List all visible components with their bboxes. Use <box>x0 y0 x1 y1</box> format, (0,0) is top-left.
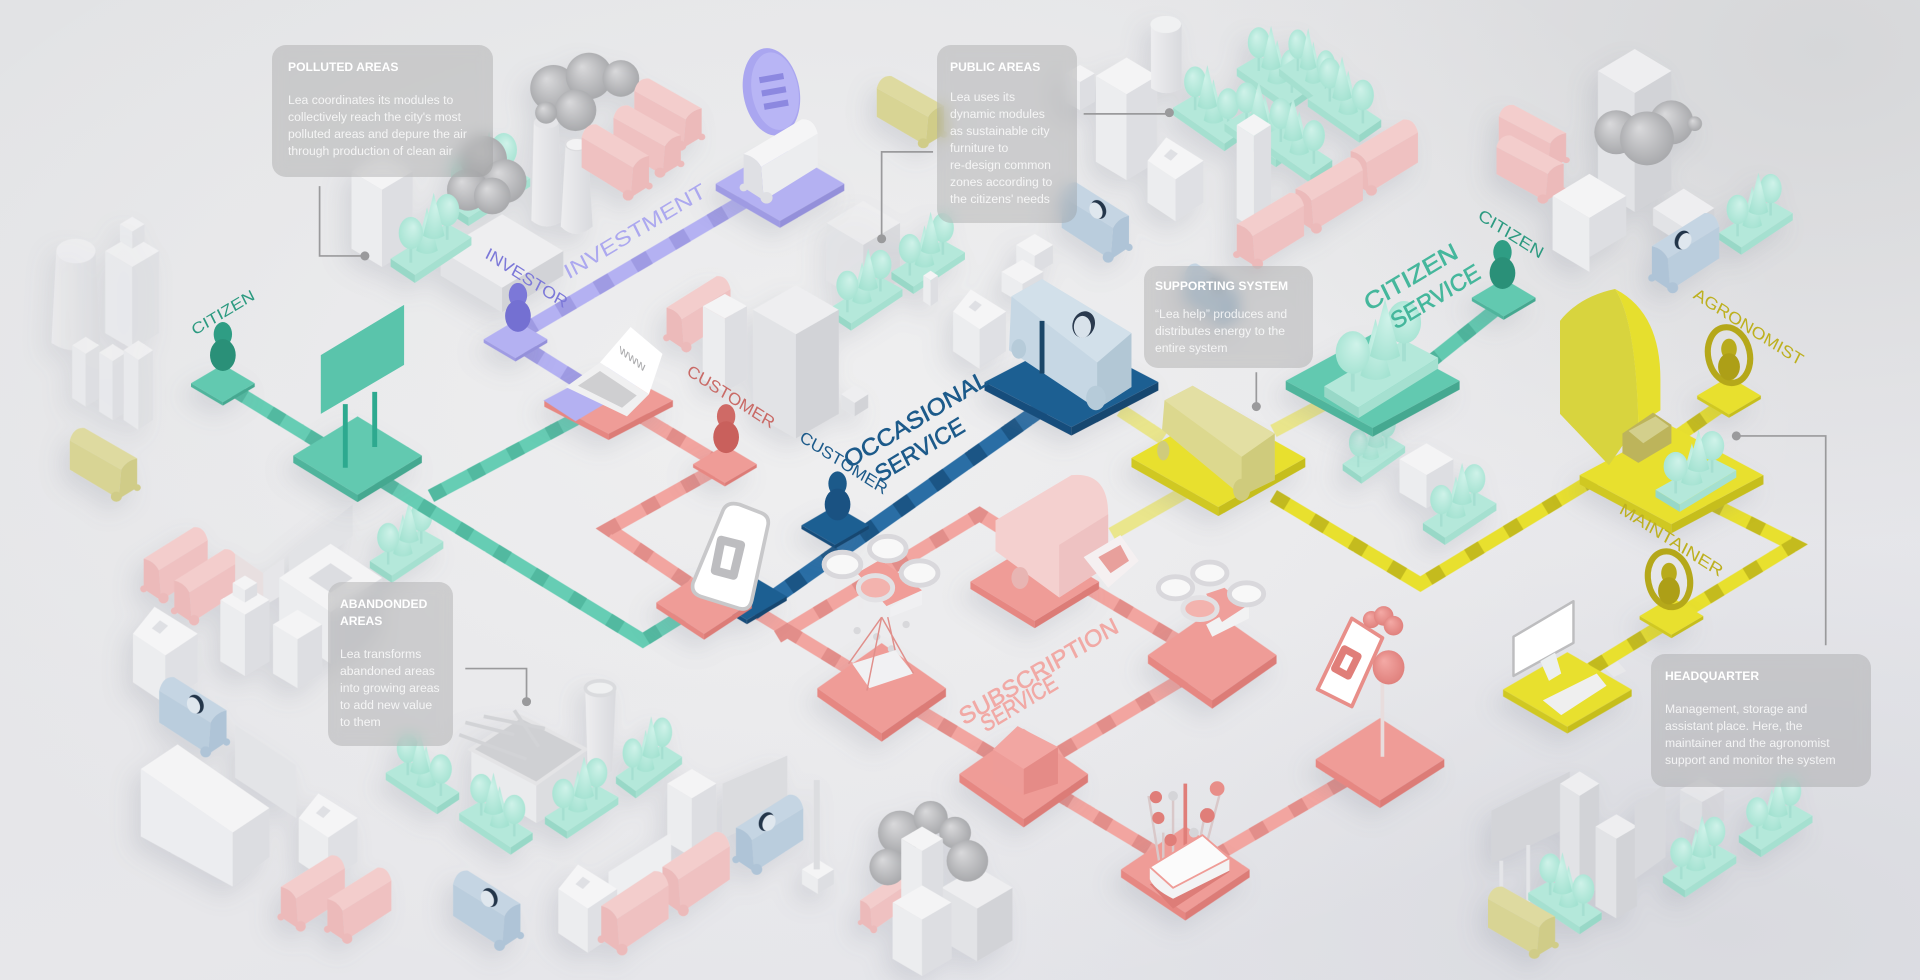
callout: public areas: Lea uses its dynamic modules as sustainable city furniture to re-design common zones according to the citizens' needs <box>950 90 1052 206</box>
computer <box>1513 601 1626 715</box>
second drone <box>1158 562 1264 637</box>
label: occasional service: OCCASIONAL <box>840 365 993 474</box>
purple routes <box>520 200 747 392</box>
headquarter building <box>1560 289 1736 512</box>
iso labels <box>189 179 1807 738</box>
billboard <box>321 305 404 468</box>
label: citizen service: SERVICE <box>1387 259 1485 335</box>
station objects <box>210 44 1755 909</box>
pink routes <box>609 410 1378 872</box>
blue vehicle <box>1009 279 1131 410</box>
pad on green platform <box>1324 299 1438 418</box>
maintainer badge <box>1643 547 1695 611</box>
phone and tree <box>1318 606 1404 757</box>
label: customer blue: CUSTOMER <box>797 427 891 498</box>
label: citizen service <box>1360 238 1485 335</box>
house <box>993 726 1058 795</box>
investment coin <box>736 44 807 140</box>
leader: polluted areas <box>320 186 369 260</box>
persons <box>210 240 1515 520</box>
label: subscription service: SUBSCRIPTION <box>955 613 1123 731</box>
label: investor: INVESTOR <box>482 244 571 312</box>
purple-station van <box>740 119 818 204</box>
leader: supporting system <box>1253 372 1260 410</box>
callout: abandoned areas: Lea transforms abandoned areas into growing areas to add new value to them <box>340 647 440 729</box>
polluted district <box>351 53 705 312</box>
callout: headquarter: Management, storage and assistant place. Here, the maintainer and the agronomist support and monitor the system <box>1665 702 1836 766</box>
delivery van <box>996 475 1139 598</box>
agronomist badge <box>1703 323 1755 387</box>
callout: abandoned areas: ABANDONDED <box>340 597 427 611</box>
small mid-right district <box>1343 410 1496 545</box>
callout: supporting system: “Lea help” produces and distributes energy to the entire system <box>1155 307 1287 355</box>
leader lines <box>320 109 1826 705</box>
pale-yellow bus on yellow platform <box>1157 386 1275 501</box>
leader: abandoned areas <box>465 669 530 705</box>
callout: supporting system <box>1144 266 1313 368</box>
label: maintainer: MAINTAINER <box>1617 499 1726 581</box>
label: citizen left: CITIZEN <box>189 287 258 339</box>
left-lower district <box>133 501 443 887</box>
leader: public areas left <box>878 152 933 242</box>
label: citizen service: CITIZEN <box>1360 238 1462 317</box>
drone with cage <box>824 536 938 691</box>
callout: polluted areas: Lea coordinates its modules to collectively reach the city's most polluted areas and depure the air through production of clean air <box>288 93 467 158</box>
bottom-right district <box>1488 771 1812 959</box>
public district buildings <box>663 16 1418 438</box>
label: occasional service: SERVICE <box>871 412 969 488</box>
leader: headquarter <box>1733 432 1826 645</box>
callout: public areas: PUBLIC AREAS <box>950 60 1040 74</box>
factory district <box>277 681 1013 976</box>
station platforms <box>191 146 1763 921</box>
label: citizen right: CITIZEN <box>1475 205 1547 262</box>
green routes <box>233 306 1500 640</box>
callout: supporting system: SUPPORTING SYSTEM <box>1155 279 1288 293</box>
callout: headquarter: HEADQUARTER <box>1665 669 1759 683</box>
label: agronomist: AGRONOMIST <box>1691 284 1807 370</box>
flower planter <box>1149 781 1229 909</box>
label: investment: INVESTMENT <box>560 179 710 284</box>
laptop <box>566 327 662 416</box>
callout: public areas <box>937 45 1077 223</box>
yellow routes <box>1112 398 1794 676</box>
callout: headquarter <box>1651 654 1871 787</box>
laptop: www <box>618 340 647 376</box>
top-right district <box>1496 49 1793 293</box>
callout: abandoned areas: AREAS <box>340 614 382 628</box>
label: customer red: CUSTOMER <box>684 361 778 432</box>
label: subscription service: SERVICE <box>977 670 1062 738</box>
far-left buildings <box>51 217 159 430</box>
pale-yellow bus, left <box>70 428 141 502</box>
route paths <box>233 200 1794 872</box>
phone <box>693 504 768 609</box>
blue route <box>753 392 1065 612</box>
callout: polluted areas <box>272 45 493 177</box>
callout: abandoned areas <box>328 582 453 746</box>
callout: polluted areas: POLLUTED AREAS <box>288 60 398 74</box>
leader: public areas right <box>1084 109 1173 116</box>
